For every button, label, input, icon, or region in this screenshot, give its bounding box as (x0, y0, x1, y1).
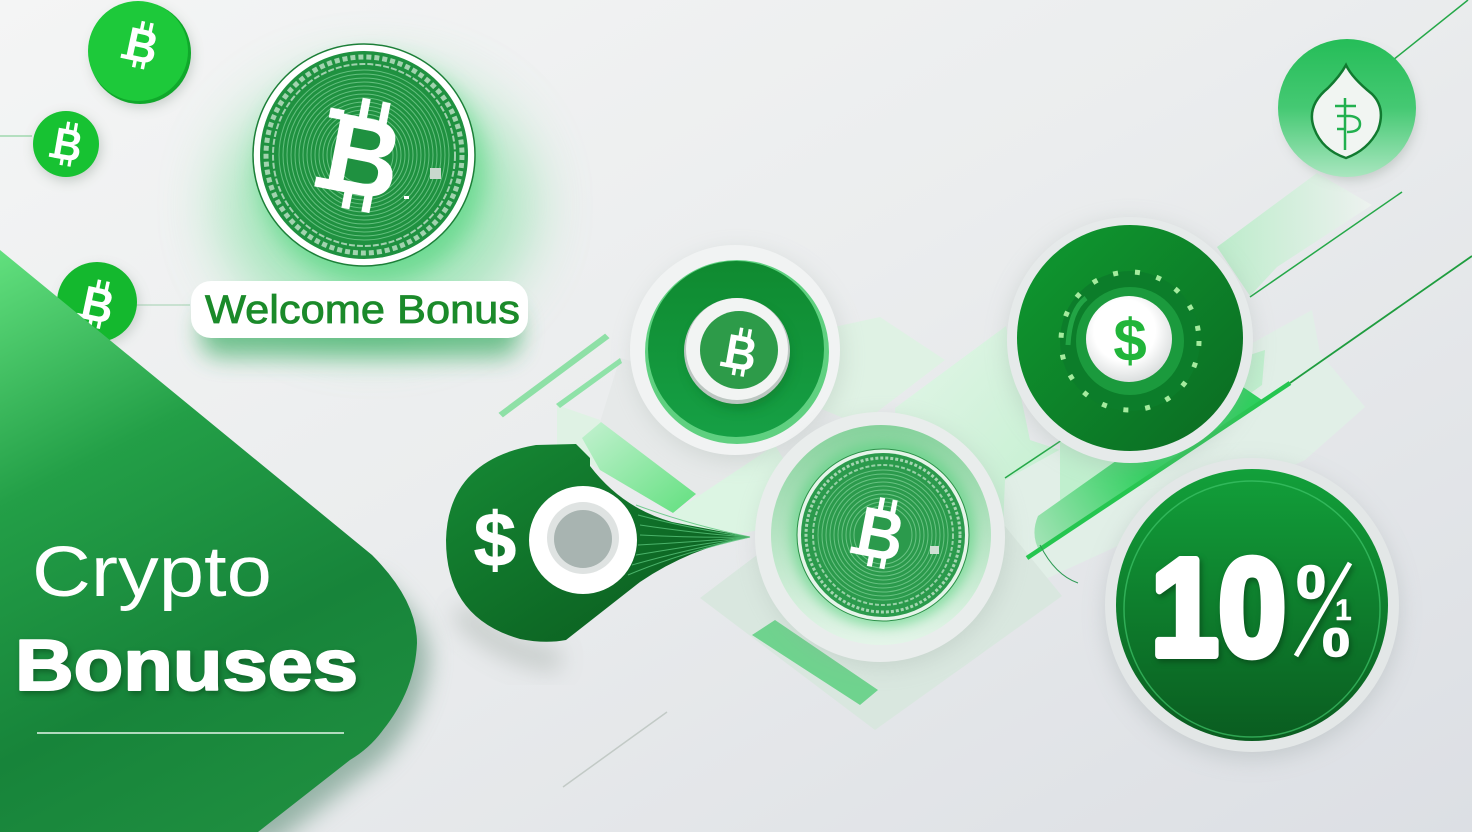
icon: large bitcoin coin (253, 44, 475, 266)
heading: bonuses: Bonuses (15, 626, 358, 706)
icon: green dollar coin: $ (1113, 307, 1147, 374)
callout: welcome bonus pill (191, 281, 528, 357)
ten percent text: 0 (1322, 621, 1350, 665)
leaf dollar mark (1335, 98, 1360, 150)
tail fine lines (628, 505, 750, 575)
heading underline (37, 732, 344, 734)
heading: crypto: Crypto (32, 533, 272, 612)
icon: small bitcoin coin lower: B (77, 275, 119, 334)
decorative geometric bands (500, 173, 1372, 730)
icon: center bitcoin coin (755, 412, 1007, 667)
ring of dots (1061, 272, 1199, 410)
icon: small bitcoin coin top: B (121, 17, 163, 75)
ten percent text: 0 (1296, 556, 1326, 608)
dollar symbol: $ (474, 498, 516, 583)
icon: small bitcoin coin top (88, 1, 192, 107)
icon: small bitcoin coin middle (33, 111, 101, 181)
icon: green dollar coin (1007, 217, 1253, 467)
icon: large bitcoin coin: B (316, 88, 412, 225)
icon: mid bitcoin coin with ring: B (721, 323, 761, 382)
callout: welcome bonus pill: Welcome Bonus (205, 288, 520, 332)
icon: small bitcoin coin middle: B (49, 118, 86, 171)
ten percent text: 10 (1151, 531, 1286, 685)
ten percent text: 1 (1335, 594, 1352, 627)
icon: leaf dollar coin (1278, 39, 1416, 180)
panel: crypto bonuses (0, 250, 429, 832)
icon: mid bitcoin coin with ring (630, 245, 842, 460)
icon: dollar bubble (446, 444, 750, 660)
icon: center bitcoin coin: B (851, 492, 911, 578)
leaf shape (1312, 65, 1381, 158)
icon: ten percent badge (1105, 458, 1399, 758)
background glow around large coin (220, 60, 530, 335)
white donut (529, 486, 637, 594)
icon: small bitcoin coin lower (57, 262, 139, 345)
